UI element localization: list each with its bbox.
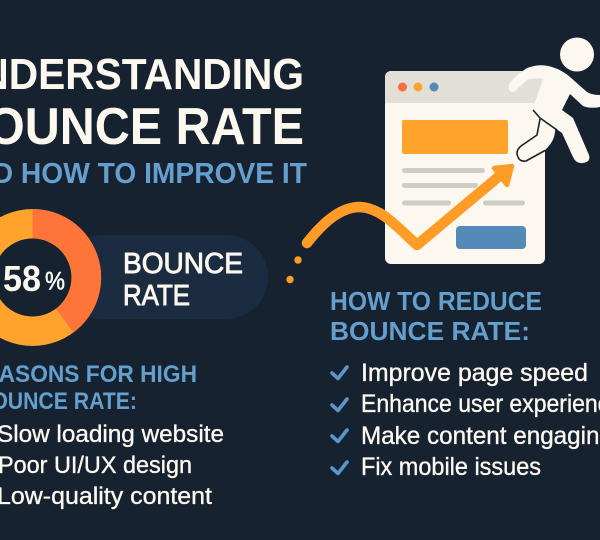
growth arrow <box>307 166 512 245</box>
donut chart: 58%: % <box>45 268 65 296</box>
bounce rate pill: RATE <box>123 280 190 312</box>
check icons <box>332 367 347 474</box>
checklist: Improve page speed <box>361 359 588 387</box>
checklist <box>332 359 600 481</box>
how to reduce heading: HOW TO REDUCE <box>330 286 542 316</box>
donut chart: 58%: 58 <box>3 258 41 299</box>
running person icon <box>509 38 600 163</box>
bounce rate pill: BOUNCE <box>123 248 243 280</box>
reasons list: Slow loading website <box>0 421 224 448</box>
bounce dots <box>286 256 302 283</box>
browser window illustration <box>385 71 545 264</box>
bounce rate pill <box>60 235 268 319</box>
reasons heading <box>0 361 197 415</box>
how to reduce heading: BOUNCE RATE: <box>330 316 530 346</box>
checklist: Fix mobile issues <box>361 453 541 481</box>
reasons list: Poor UI/UX design <box>0 452 192 479</box>
title <box>0 50 307 190</box>
donut chart: 58% <box>0 209 101 346</box>
how to reduce heading <box>330 286 542 346</box>
reasons list: Low-quality content <box>0 483 212 510</box>
reasons list <box>0 421 224 510</box>
